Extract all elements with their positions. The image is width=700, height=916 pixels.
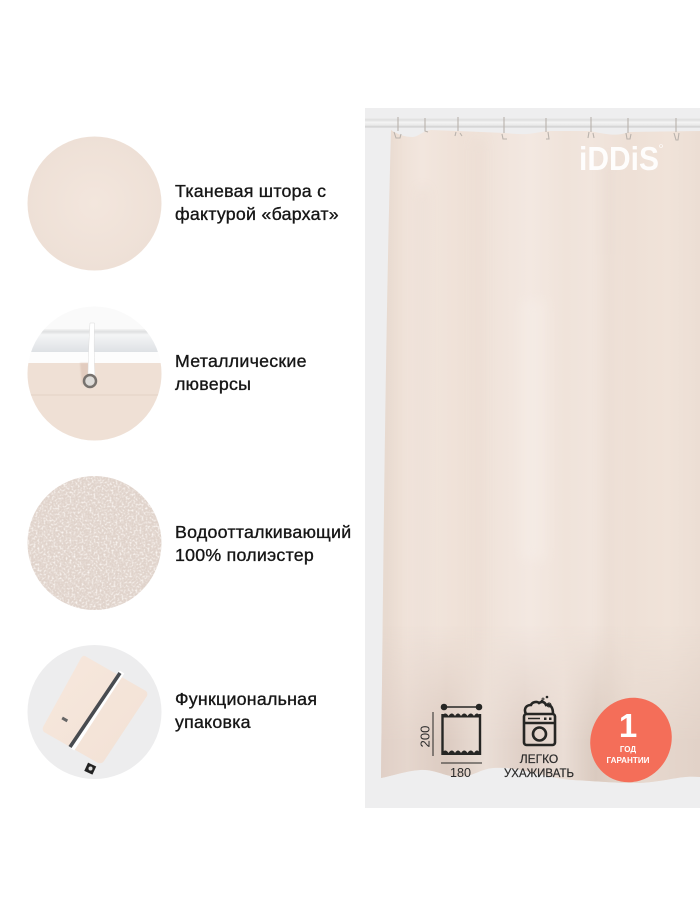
circle: packaging photo	[27, 644, 162, 780]
circle: grommet photo	[28, 322, 162, 440]
text: polyester	[175, 522, 351, 565]
panel: product photo background	[365, 108, 700, 808]
pouch	[43, 656, 147, 763]
badge: warranty	[575, 683, 687, 797]
height label: 200	[418, 726, 432, 748]
care label: УХАЖИВАТЬ	[504, 766, 574, 780]
circle: water-repellent texture	[27, 475, 162, 611]
main artwork	[28, 108, 700, 808]
shower rail	[365, 118, 700, 128]
warranty number: 1	[619, 707, 637, 744]
hang tag	[84, 763, 96, 775]
width label: 180	[450, 765, 471, 780]
logo: iDDiS	[579, 140, 659, 177]
text: grommets	[174, 351, 307, 394]
grommet	[84, 375, 96, 387]
curtain hooks	[394, 117, 679, 140]
warranty caption: ГАРАНТИИ	[606, 756, 650, 765]
text: packaging: Функциональная	[175, 689, 317, 709]
rod	[441, 704, 482, 710]
text: polyester: Водоотталкивающий	[175, 522, 351, 542]
text: fabric	[175, 181, 339, 224]
width line	[441, 762, 482, 764]
icon: curtain size	[418, 704, 482, 780]
zipper	[72, 672, 122, 749]
label tag	[61, 717, 68, 722]
warranty caption	[606, 745, 650, 765]
care label: ЛЕГКО	[520, 752, 558, 766]
circle: fabric	[28, 136, 162, 270]
icon: washing machine	[524, 696, 555, 745]
text: fabric: Тканевая штора с	[175, 181, 326, 201]
text: packaging: упаковка	[175, 712, 251, 732]
care label	[504, 752, 574, 780]
text: grommets: Металлические	[175, 351, 307, 371]
text: polyester: 100% полиэстер	[175, 544, 314, 564]
text: grommets: люверсы	[175, 374, 251, 394]
text: fabric: фактурой «бархат»	[175, 204, 339, 224]
warranty caption: ГОД	[620, 745, 636, 754]
curtain outline	[442, 714, 480, 755]
height line	[432, 712, 434, 756]
text: packaging	[174, 689, 317, 732]
shower curtain	[375, 128, 700, 790]
logo trademark	[660, 144, 662, 148]
